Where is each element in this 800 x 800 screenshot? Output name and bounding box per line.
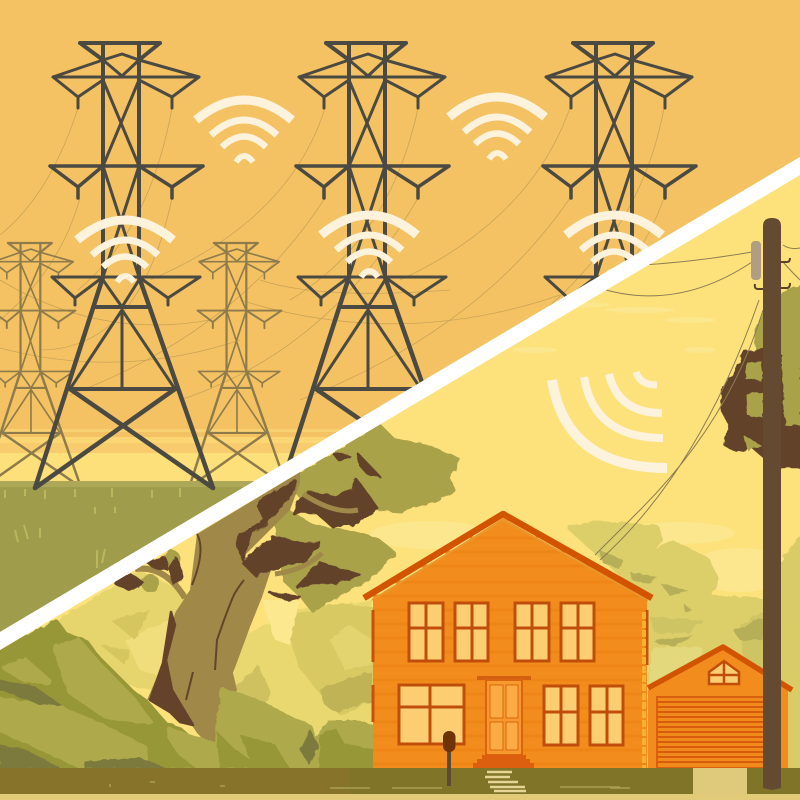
- gable window: [709, 661, 739, 684]
- panel: neighborhood scene: [0, 170, 800, 800]
- corner trim: [642, 612, 646, 768]
- house siding stripes: [373, 536, 590, 598]
- bark lines: [186, 534, 244, 700]
- wifi signal on tower 3: [566, 215, 662, 277]
- door steps: [473, 755, 534, 768]
- wifi signal on tower 1: [77, 220, 173, 282]
- horizon glow bands: [0, 429, 342, 481]
- trunk shadow: [150, 612, 193, 725]
- pole crossarm brackets: [755, 258, 790, 289]
- tree trunk: [147, 472, 300, 753]
- house: [364, 514, 652, 768]
- stepping stones path: [485, 772, 526, 791]
- trunk left branch: [135, 569, 185, 598]
- wifi signal over house: [552, 372, 667, 468]
- background trees left: [58, 572, 373, 736]
- roof underside highlight: [372, 520, 648, 600]
- upper windows: [409, 603, 594, 661]
- distant tower center: [189, 243, 287, 487]
- ground: grass field: [0, 481, 254, 632]
- house roof: [364, 514, 652, 598]
- branch highlights: [275, 494, 358, 574]
- lower windows: [399, 685, 623, 745]
- house wall: [373, 518, 647, 768]
- wifi signal between towers 1 and 2: [196, 100, 292, 162]
- wifi signal on tower 2: [321, 215, 417, 277]
- wifi signal between towers 2 and 3: [449, 97, 545, 159]
- window shutters trim: [373, 610, 647, 722]
- grass strip with driveway: [0, 768, 800, 800]
- distant tower left: [0, 243, 81, 487]
- main tower 1: [35, 43, 213, 488]
- sky background: [0, 0, 800, 500]
- tree canopy foliage: [141, 427, 458, 610]
- front door: [473, 676, 534, 768]
- garage: [648, 647, 792, 768]
- utility pole transformer: [751, 241, 761, 280]
- sky: [0, 170, 800, 800]
- main tower 3: [541, 40, 698, 297]
- garage roof: [648, 647, 792, 690]
- background trees right: [570, 523, 800, 770]
- tree behind utility pole: [722, 287, 800, 467]
- tree dark shadow patches: [115, 453, 380, 590]
- large oak tree: [115, 427, 458, 753]
- utility wires: [500, 245, 800, 560]
- diagonal white divider: [0, 157, 800, 650]
- bush left: [0, 619, 189, 768]
- canopy shadows over trunk: [238, 480, 360, 600]
- garage door: [657, 697, 767, 768]
- mailbox: [443, 731, 456, 786]
- transmission wires: [0, 108, 664, 400]
- bush right: [166, 687, 373, 768]
- utility pole: [763, 218, 781, 790]
- main tower 2: [287, 40, 451, 462]
- wispy clouds: [370, 302, 790, 592]
- garage wall: [648, 650, 788, 768]
